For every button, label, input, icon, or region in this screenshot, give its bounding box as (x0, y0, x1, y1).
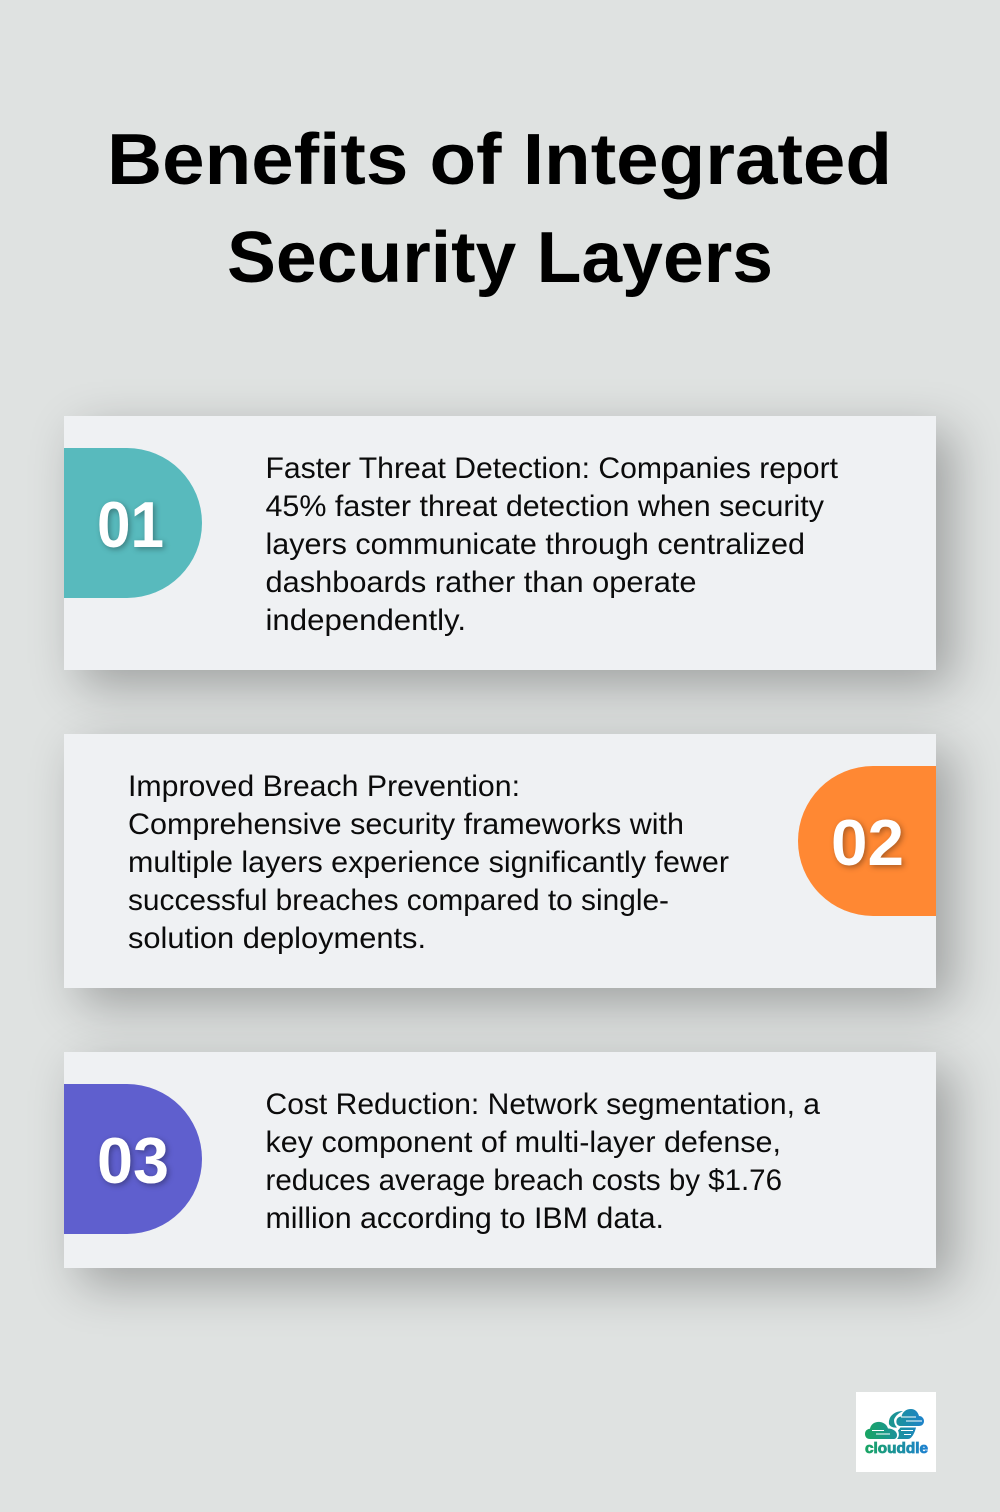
badge: 01 (64, 448, 202, 598)
text: improved breach prevention: successful breaches compared to single- (128, 884, 669, 917)
badge: 02: 02 (831, 806, 904, 879)
text: improved breach prevention: multiple layers experience significantly fewer (128, 846, 729, 879)
logo: clouddle (856, 1392, 936, 1472)
badge: 01: 01 (97, 488, 164, 561)
text: cost reduction: Cost Reduction: Network segmentation, a (266, 1088, 820, 1121)
text: faster threat detection: layers communicate through centralized (266, 528, 805, 561)
text: cost reduction: reduces average breach costs by $1.76 (266, 1164, 782, 1197)
text: cost reduction: million according to IBM data. (266, 1202, 664, 1235)
panel: faster threat detection (64, 416, 936, 670)
logo wordmark: clouddle (865, 1440, 928, 1457)
badge: 02 (798, 766, 936, 916)
text: improved breach prevention: Improved Breach Prevention: (128, 770, 520, 803)
text: cost reduction: key component of multi-layer defense, (266, 1126, 781, 1159)
panel: improved breach prevention (64, 734, 936, 988)
text: faster threat detection: 45% faster threat detection when security (266, 490, 824, 523)
text: improved breach prevention (128, 770, 729, 955)
text: improved breach prevention: Comprehensive security frameworks with (128, 808, 684, 841)
title: Benefits of Integrated (107, 120, 892, 200)
badge: 03: 03 (97, 1124, 169, 1197)
text: faster threat detection: independently. (266, 604, 466, 637)
text: faster threat detection (266, 452, 839, 637)
badge: 03 (64, 1084, 202, 1234)
text: cost reduction (266, 1088, 820, 1235)
text: improved breach prevention: solution deployments. (128, 922, 426, 955)
panel: cost reduction (64, 1052, 936, 1268)
text: faster threat detection: Faster Threat Detection: Companies report (266, 452, 839, 485)
text: faster threat detection: dashboards rather than operate (266, 566, 696, 599)
icon: clouds (865, 1409, 924, 1439)
title: Security Layers (227, 218, 773, 298)
title (107, 120, 892, 298)
